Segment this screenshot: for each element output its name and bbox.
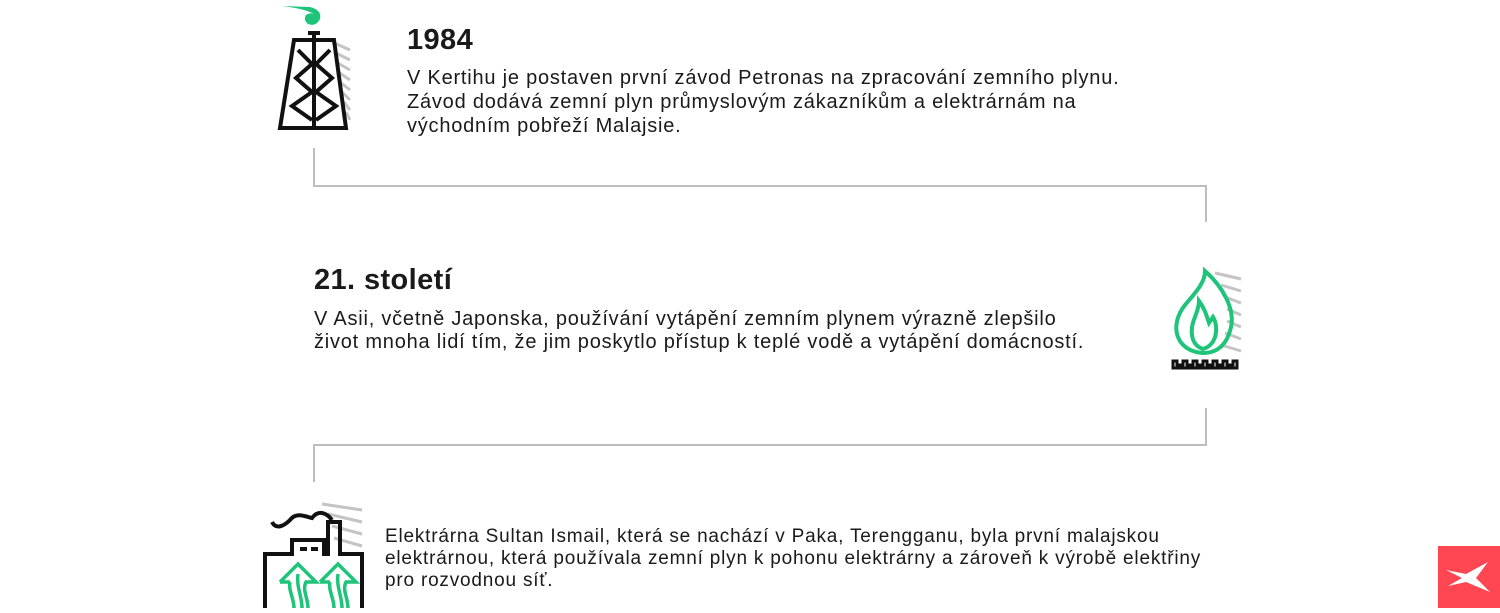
text: 21. století: V Asii, včetně Japonska, používání vytápění zemním plynem výrazně zlepšilo xyxy=(314,308,1057,330)
icon: gas flame burner xyxy=(1172,266,1242,370)
text: power plant xyxy=(385,526,1201,591)
text: power plant: pro rozvodnou síť. xyxy=(385,570,553,591)
text: 1984: Závod dodává zemní plyn průmyslovým zákazníkům a elektrárnám na xyxy=(407,91,1076,113)
heading: 21. století: 21. století xyxy=(314,264,452,296)
icon: gas derrick xyxy=(278,6,352,130)
text: 1984 xyxy=(407,67,1119,137)
text: 21. století xyxy=(314,308,1084,353)
text: power plant: Elektrárna Sultan Ismail, která se nachází v Paka, Terengganu, byla první malajskou xyxy=(385,526,1160,547)
icon: power plant xyxy=(263,502,364,608)
text: 1984: východním pobřeží Malajsie. xyxy=(407,115,682,137)
heading: 1984: 1984 xyxy=(407,24,473,56)
logo xyxy=(1438,546,1500,608)
text: 1984: V Kertihu je postaven první závod Petronas na zpracování zemního plynu. xyxy=(407,67,1119,89)
text: power plant: elektrárnou, která používala zemní plyn k pohonu elektrárny a zároveň k výrobě elektřiny xyxy=(385,548,1201,569)
text: 21. století: život mnoha lidí tím, že jim poskytlo přístup k teplé vodě a vytápění domácností. xyxy=(314,331,1084,353)
